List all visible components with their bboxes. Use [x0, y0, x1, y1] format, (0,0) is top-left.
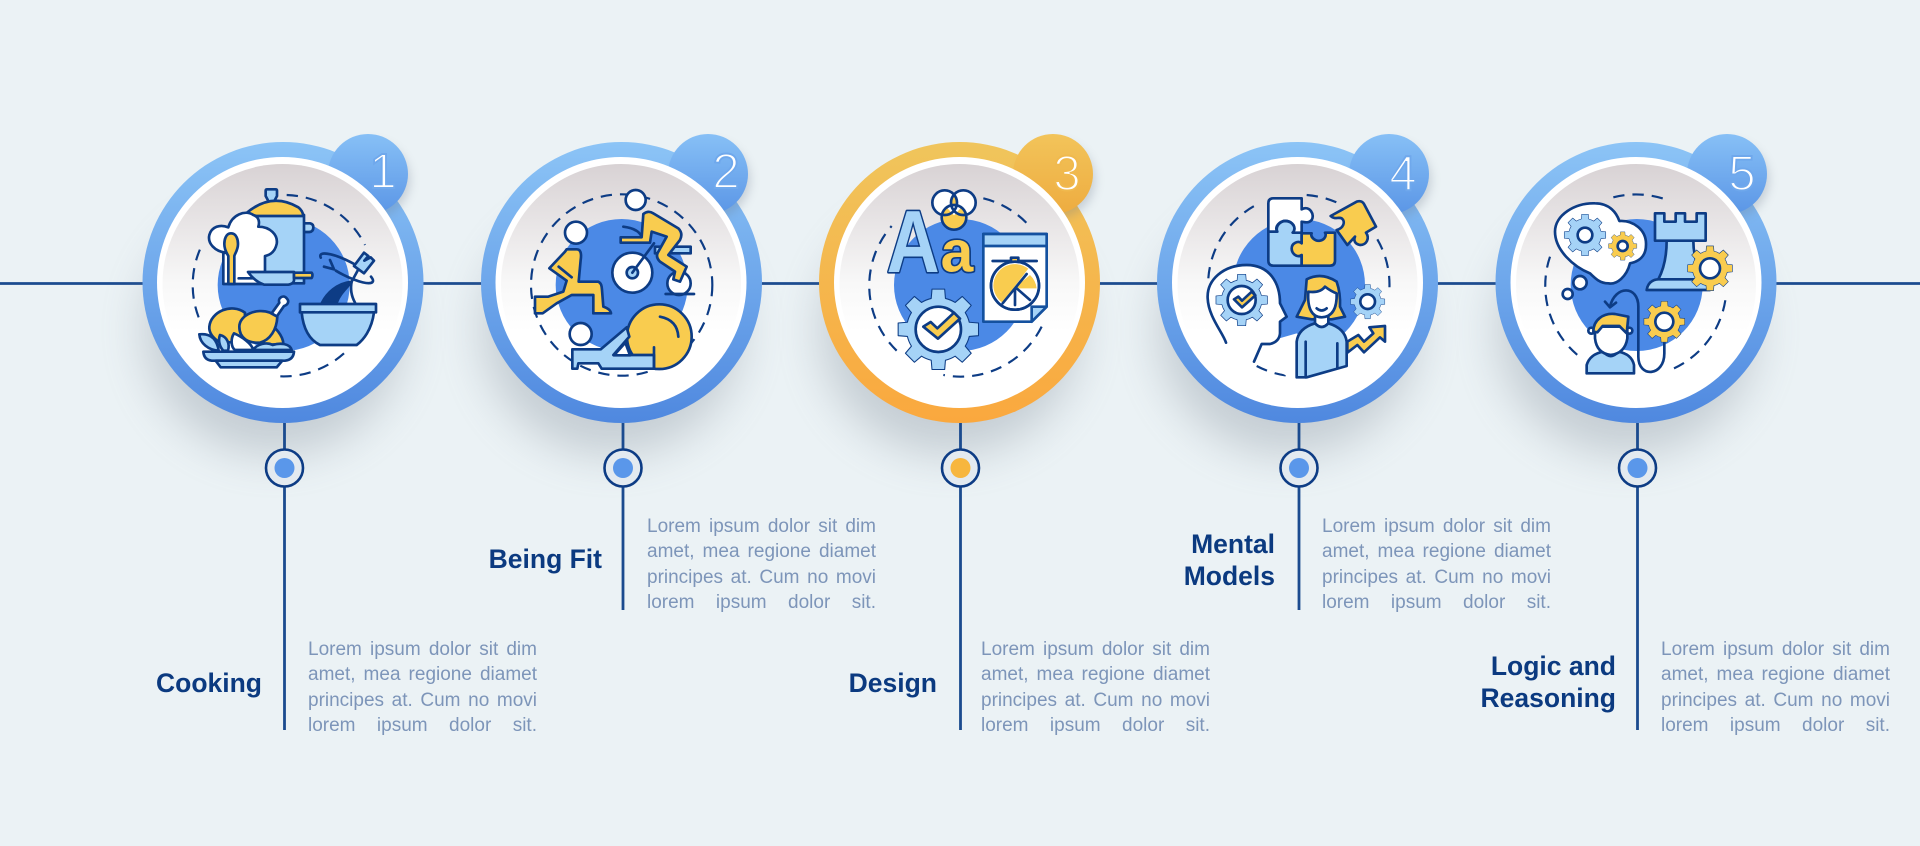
- badge 3: 3: [1053, 147, 1081, 201]
- panel: step 3 design circle: [819, 134, 1100, 455]
- text block: Being Fit description: principes at. Cum no movi: [647, 567, 876, 588]
- text block: Logic and Reasoning description: [1661, 639, 1890, 736]
- Aa letters: a: [941, 220, 974, 285]
- heading: Logic and Reasoning: Reasoning: [1481, 682, 1616, 712]
- badge 1: 1: [369, 145, 397, 199]
- heading: Mental Models: Models: [1184, 560, 1275, 590]
- icon: fitness: [531, 190, 712, 376]
- heading: Logic and Reasoning: Logic and: [1491, 651, 1616, 681]
- icon: logic and reasoning: [1545, 194, 1732, 373]
- panel: step 1 cooking circle: [142, 134, 424, 455]
- text block: Logic and Reasoning description: lorem ipsum dolor sit.: [1661, 715, 1890, 736]
- text block: Being Fit description: lorem ipsum dolor sit.: [647, 592, 876, 613]
- icon: cooking: [193, 189, 376, 376]
- badge 5: 5: [1728, 147, 1756, 201]
- text block: Design description: amet, mea regione diamet: [981, 664, 1210, 685]
- venn diagram: [932, 190, 976, 230]
- text block: Logic and Reasoning description: Lorem ipsum dolor sit dim: [1661, 639, 1890, 660]
- text block: Design description: principes at. Cum no movi: [981, 690, 1210, 711]
- heading: Mental Models: [1184, 529, 1275, 590]
- text block: Cooking description: Lorem ipsum dolor sit dim: [308, 639, 537, 660]
- panel: step 2 being fit circle: [481, 134, 762, 455]
- heading: Design: Design: [849, 668, 937, 698]
- icon: design: [869, 190, 1047, 377]
- text block: Design description: Lorem ipsum dolor sit dim: [981, 639, 1210, 660]
- text block: Design description: [981, 639, 1210, 736]
- text block: Mental Models description: lorem ipsum dolor sit.: [1322, 592, 1551, 613]
- badge 2: 2: [712, 145, 740, 199]
- connector and node 1: [266, 423, 303, 730]
- text block: Cooking description: lorem ipsum dolor sit.: [308, 715, 537, 736]
- ring 1: [142, 142, 424, 423]
- connector and node 4: [1280, 423, 1318, 610]
- ring 2: [481, 142, 762, 423]
- text block: Being Fit description: Lorem ipsum dolor sit dim: [647, 516, 876, 537]
- badge 2: [668, 134, 748, 214]
- text block: Mental Models description: principes at. Cum no movi: [1322, 567, 1551, 588]
- text block: Being Fit description: amet, mea regione diamet: [647, 541, 876, 562]
- icon: mental models: [1208, 195, 1389, 380]
- panel: step 5 logic and reasoning circle: [1496, 134, 1776, 455]
- text block: Cooking description: amet, mea regione diamet: [308, 664, 537, 685]
- Aa letters: [887, 194, 974, 292]
- ring 5: [1496, 142, 1776, 423]
- text block: Logic and Reasoning description: amet, mea regione diamet: [1661, 664, 1890, 685]
- badge 4: 4: [1389, 147, 1417, 201]
- text block: Cooking description: [308, 639, 537, 736]
- text block: Mental Models description: Lorem ipsum dolor sit dim: [1322, 516, 1551, 537]
- heading: Cooking: Cooking: [156, 668, 262, 698]
- text block: Logic and Reasoning description: principes at. Cum no movi: [1661, 690, 1890, 711]
- connector and node 5: [1619, 423, 1656, 730]
- text block: Design description: lorem ipsum dolor sit.: [981, 715, 1210, 736]
- connector and node 3: [942, 423, 979, 730]
- Aa letters: A: [887, 194, 940, 292]
- text block: Being Fit description: [647, 516, 876, 613]
- connector and node 2: [604, 423, 642, 610]
- badge 3: [1013, 134, 1093, 214]
- heading: Logic and Reasoning: [1481, 651, 1616, 712]
- text block: Mental Models description: [1322, 516, 1551, 613]
- badge 1: [328, 134, 408, 214]
- ring 4: [1157, 142, 1438, 423]
- badge 4: [1349, 134, 1429, 214]
- badge 5: [1687, 134, 1767, 214]
- ring 3: [819, 142, 1100, 423]
- heading: Mental Models: Mental: [1191, 529, 1275, 559]
- heading: Being Fit: Being Fit: [489, 544, 602, 574]
- text block: Cooking description: principes at. Cum no movi: [308, 690, 537, 711]
- panel: step 4 mental models circle: [1157, 134, 1438, 455]
- text block: Mental Models description: amet, mea regione diamet: [1322, 541, 1551, 562]
